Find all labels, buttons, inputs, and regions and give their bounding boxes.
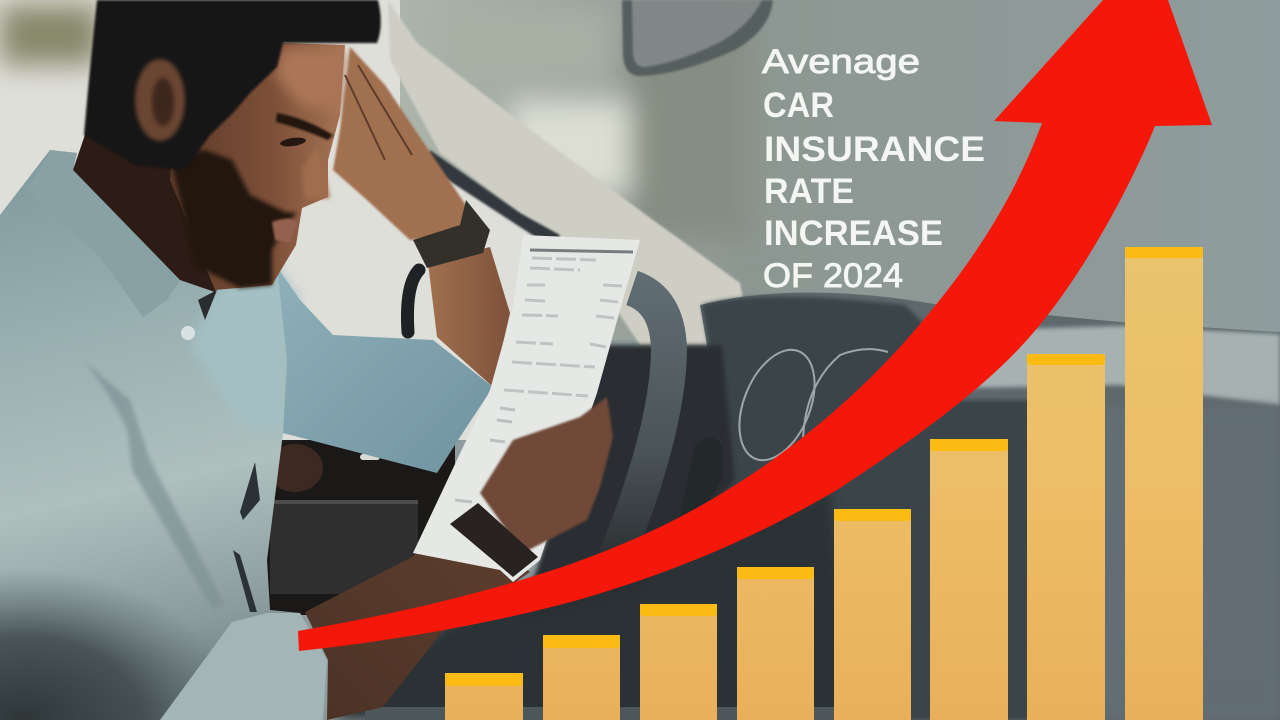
lower forearm	[305, 518, 530, 720]
forehead highlight	[275, 48, 345, 110]
bar 6	[930, 439, 1008, 720]
raised-arm shirt sleeve	[277, 267, 493, 473]
wristwatch	[413, 200, 490, 268]
wristband	[450, 503, 538, 577]
title	[762, 43, 985, 295]
bar 4	[737, 567, 814, 720]
instrument gauges	[725, 339, 888, 471]
ear	[135, 59, 185, 141]
red rising arrow	[298, 0, 1212, 651]
shirt button	[181, 326, 195, 340]
insurance bill	[413, 235, 640, 582]
rolled shirt cuff	[160, 613, 327, 720]
title: Avenage	[762, 43, 920, 81]
bar chart	[445, 247, 1203, 720]
pillar lower shadow	[425, 150, 560, 246]
shirt torso and sleeve	[0, 150, 327, 720]
chest panel	[190, 267, 300, 433]
eye	[280, 136, 306, 148]
raised forearm	[428, 247, 510, 387]
hand holding bill	[480, 397, 613, 553]
title: CAR	[763, 86, 834, 125]
bar 2	[543, 635, 620, 720]
rear-view mirror	[622, 0, 773, 76]
bar 5	[834, 509, 911, 720]
shirt placket gaps	[233, 462, 260, 612]
bar 8	[1125, 247, 1203, 720]
title: INSURANCE	[764, 130, 985, 169]
neck and head shadow	[73, 120, 240, 292]
finger lines	[345, 65, 412, 160]
sleeve crease	[83, 360, 225, 610]
A-pillar	[388, 0, 745, 345]
bar 7	[1027, 354, 1105, 720]
title: OF 2024	[763, 257, 903, 295]
lips	[272, 218, 297, 243]
title: INCREASE	[764, 214, 943, 253]
brow	[276, 113, 333, 140]
gear stalk	[680, 438, 722, 515]
beard	[170, 150, 297, 288]
dark dash centre	[400, 296, 1030, 720]
bar 1	[445, 673, 523, 720]
area behind steering wheel	[520, 345, 735, 620]
hair	[84, 0, 381, 170]
lower sleeve shadow	[0, 560, 230, 720]
dashboard light band	[960, 326, 1280, 405]
lower cabin	[265, 440, 455, 615]
bill text lines	[455, 250, 633, 502]
nose	[302, 145, 330, 198]
bar 3	[640, 604, 717, 720]
face	[170, 43, 345, 290]
steering wheel	[615, 288, 669, 560]
title: RATE	[764, 172, 854, 211]
collar	[27, 150, 180, 317]
hand on forehead	[333, 47, 470, 240]
stressed man	[0, 0, 640, 720]
inner ear	[152, 78, 174, 126]
dashboard	[380, 292, 1280, 720]
placket notch	[198, 290, 217, 320]
